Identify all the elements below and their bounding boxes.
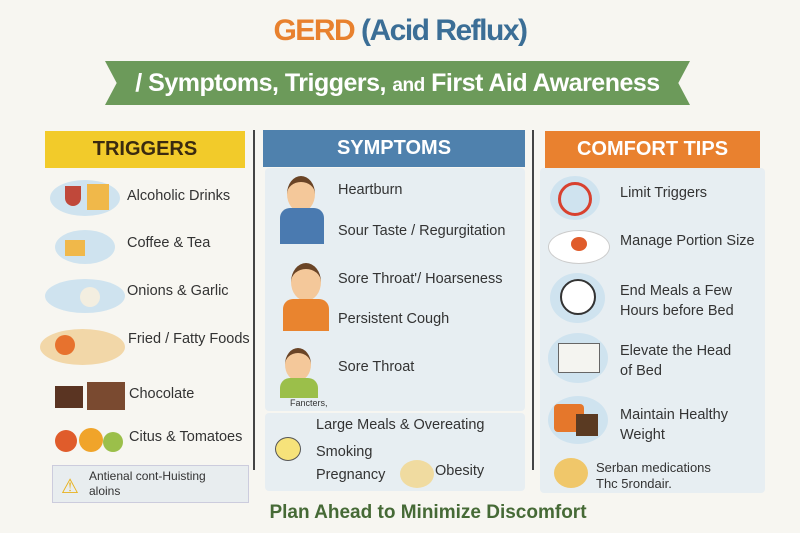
panel: comfort tips: Elevate the Head: [620, 343, 731, 359]
trigger: citrus: Citus & Tomatoes: [129, 429, 242, 445]
subtitle banner: / Symptoms, Triggers, and First Aid Awareness: [135, 69, 660, 97]
trigger: citrus: [55, 428, 242, 452]
tip: pillow: [548, 333, 608, 383]
panel: symptoms: [265, 168, 525, 411]
panel: symptoms: Sore Throat: [338, 359, 414, 375]
panel: comfort tips: Thc 5rondair.: [596, 476, 672, 491]
header: triggers: TRIGGERS: [93, 138, 197, 160]
warning box: Antienal cont-Huisting: [89, 469, 206, 483]
panel: risk factors: Obesity: [435, 463, 484, 479]
trigger: onions: [45, 279, 229, 313]
title: GERD (Acid Reflux): [273, 14, 527, 47]
panel: symptoms: Persistent Cough: [338, 311, 449, 327]
warning box: ⚠: [61, 476, 79, 498]
tip: portion: [548, 230, 610, 264]
subtitle banner: [105, 61, 690, 105]
footer: Plan Ahead to Minimize Discomfort: [269, 502, 587, 523]
symptom figure 3: [280, 348, 318, 398]
trigger: fried: [40, 329, 250, 365]
panel: symptoms: Sour Taste / Regurgitation: [338, 223, 505, 239]
tip: limit triggers: [550, 176, 600, 220]
panel: risk factors: [265, 413, 525, 491]
panel: risk factors: Large Meals & Overeating: [316, 417, 484, 433]
trigger: fried: Fried / Fatty Foods: [128, 331, 250, 347]
panel: symptoms: Fancters,: [290, 398, 328, 408]
panel: risk factors: Pregnancy: [316, 467, 385, 483]
panel: comfort tips: End Meals a Few: [620, 283, 732, 299]
symptom figure 2: [283, 263, 329, 331]
trigger: alcohol: [50, 180, 230, 216]
header: comfort tips: COMFORT TIPS: [577, 138, 728, 160]
trigger: alcohol: Alcoholic Drinks: [127, 188, 230, 204]
panel: comfort tips: of Bed: [620, 363, 662, 379]
tip: clock: [550, 273, 605, 323]
trigger: chocolate: [55, 382, 194, 410]
trigger: onions: Onions & Garlic: [127, 283, 229, 299]
panel: comfort tips: [540, 168, 765, 493]
header: comfort tips: [545, 131, 760, 168]
panel: risk factors: Smoking: [316, 444, 372, 460]
tip: medications: [554, 458, 588, 488]
symptom figure 1: [280, 176, 324, 244]
header: symptoms: [263, 130, 525, 167]
panel: symptoms: Sore Throat'/ Hoarseness: [338, 271, 502, 287]
warning box: aloins: [89, 484, 120, 498]
panel: comfort tips: Manage Portion Size: [620, 233, 755, 249]
trigger: coffee: [55, 230, 210, 264]
panel: comfort tips: Serban medications: [596, 460, 711, 475]
panel: triggers: [40, 180, 250, 503]
panel: comfort tips: Weight: [620, 427, 665, 443]
trigger: chocolate: Chocolate: [129, 386, 194, 402]
panel: comfort tips: Maintain Healthy: [620, 407, 728, 423]
warning box: [52, 465, 249, 503]
symptom text 1: Heartburn: [338, 182, 402, 198]
header: triggers: [45, 131, 245, 168]
header: symptoms: SYMPTOMS: [337, 137, 451, 159]
panel: comfort tips: Limit Triggers: [620, 185, 707, 201]
trigger: coffee: Coffee & Tea: [127, 235, 210, 251]
tip: weight: [548, 396, 608, 444]
panel: comfort tips: Hours before Bed: [620, 303, 734, 319]
divider lines: [253, 130, 255, 470]
